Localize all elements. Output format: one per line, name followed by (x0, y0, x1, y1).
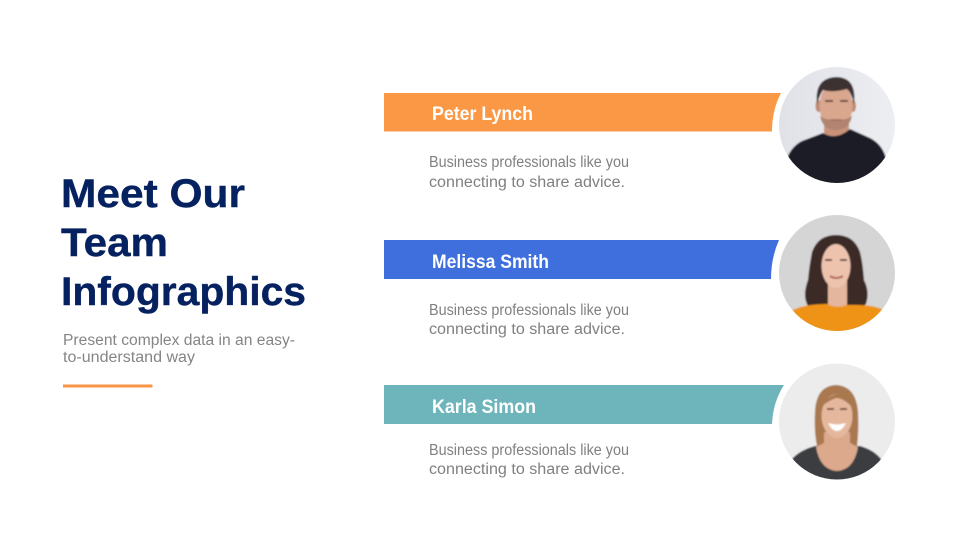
description: Karla Simon: Business professionals like you (429, 442, 629, 459)
panel: Peter Lynch (384, 63, 899, 191)
description: Melissa Smith: connecting to share advice. (429, 321, 625, 338)
description: Peter Lynch: Business professionals like you (429, 154, 629, 171)
accent line (63, 384, 152, 388)
title: Team (61, 221, 168, 265)
subtitle: Present complex data in an easy- (63, 332, 295, 349)
title: Meet Our (61, 172, 245, 216)
description: Melissa Smith: Business professionals like you (429, 302, 629, 319)
portrait: Peter Lynch (779, 67, 895, 183)
description: Melissa Smith (429, 302, 629, 338)
title (61, 172, 306, 314)
name: Karla Simon: Karla Simon (432, 397, 536, 418)
portrait: Melissa Smith (779, 215, 895, 331)
description: Karla Simon (429, 442, 629, 478)
description: Peter Lynch: connecting to share advice. (429, 174, 625, 191)
portrait: Karla Simon (779, 364, 895, 480)
subtitle (63, 332, 295, 366)
title: Infographics (61, 270, 306, 314)
panel: Karla Simon (384, 364, 895, 480)
panel: Melissa Smith (384, 211, 899, 340)
name: Peter Lynch: Peter Lynch (432, 104, 533, 125)
description: Peter Lynch (429, 154, 629, 191)
name banner: Peter Lynch (384, 93, 781, 132)
subtitle: to-understand way (63, 349, 195, 366)
name: Melissa Smith: Melissa Smith (432, 252, 549, 273)
name banner: Melissa Smith (384, 240, 779, 279)
description: Karla Simon: connecting to share advice. (429, 461, 625, 478)
name banner: Karla Simon (384, 385, 784, 424)
